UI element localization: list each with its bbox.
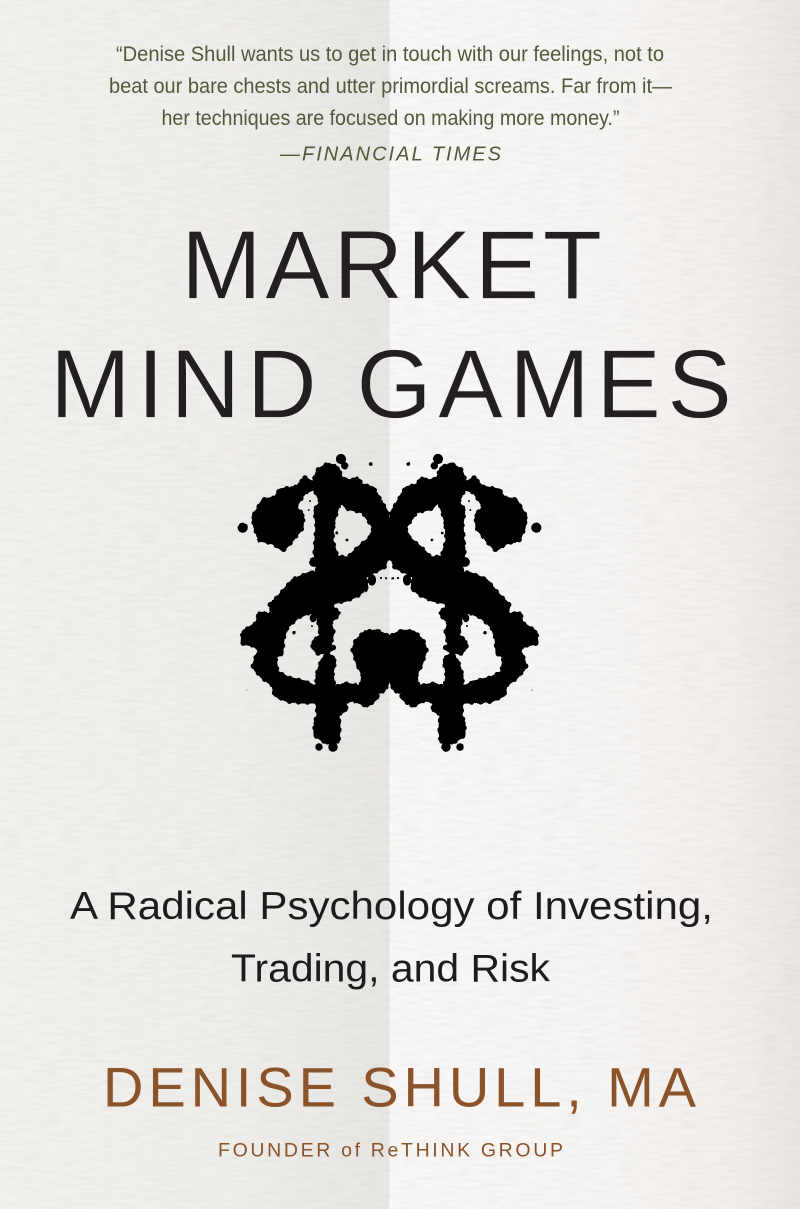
author credential: FOUNDER of ReTHINK GROUP bbox=[218, 1140, 563, 1162]
icon: mirrored ink blot bbox=[238, 454, 541, 751]
book title: MARKET bbox=[181, 210, 602, 320]
book title: MIND GAMES bbox=[50, 330, 732, 438]
review quote: “Denise Shull wants us to get in touch with our feelings, not to bbox=[116, 42, 664, 66]
subtitle bbox=[70, 885, 713, 990]
review quote: —FINANCIAL TIMES bbox=[279, 144, 502, 166]
review quote bbox=[109, 42, 672, 166]
review quote: her techniques are focused on making more money.” bbox=[162, 106, 620, 130]
subtitle: A Radical Psychology of Investing, bbox=[70, 885, 713, 928]
author name: DENISE SHULL, MA bbox=[103, 1056, 697, 1118]
subtitle: Trading, and Risk bbox=[231, 948, 551, 990]
review quote: beat our bare chests and utter primordial screams. Far from it— bbox=[109, 74, 672, 98]
book title bbox=[50, 210, 732, 438]
